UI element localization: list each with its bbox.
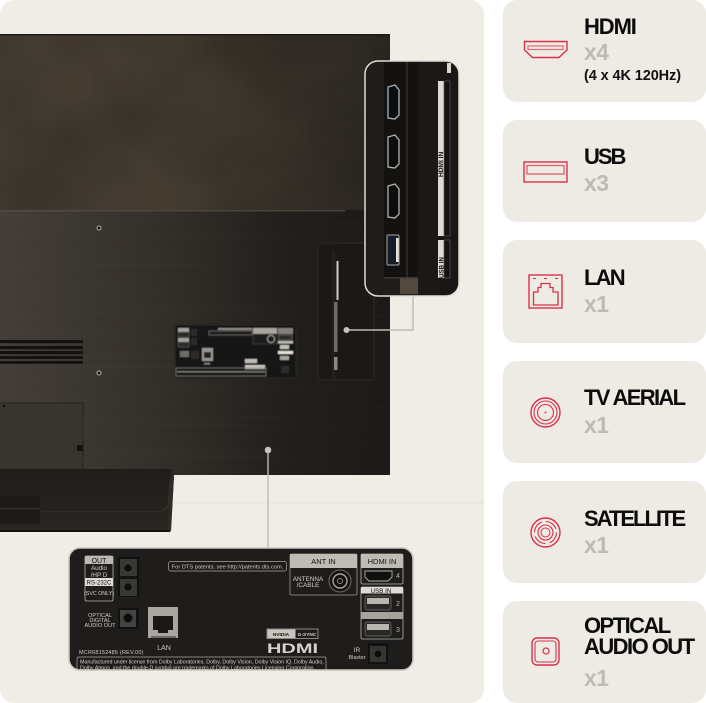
icon: aerial connector — [530, 397, 561, 428]
card: HDMI: HDMI — [584, 14, 636, 39]
card: HDMI: (4 x 4K 120Hz) — [584, 68, 681, 84]
callout: side ports — [365, 61, 459, 296]
optical audio out: OPTICAL — [88, 613, 112, 619]
HDMI IN: HDMI IN — [368, 557, 396, 566]
card: optical audio out — [503, 601, 706, 703]
card: optical audio out: AUDIO OUT — [584, 634, 694, 659]
LAN port: LAN — [157, 645, 171, 652]
optical audio out: DIGITAL — [89, 618, 111, 624]
audio and RS-232C labels: OUT — [92, 558, 107, 565]
card: USB — [503, 120, 706, 222]
licence note — [76, 656, 326, 670]
mounting holes — [97, 226, 101, 375]
USB IN: 2 — [396, 601, 400, 608]
vent — [0, 340, 83, 364]
LAN port — [148, 607, 178, 652]
audio and RS-232C labels: Audio — [91, 565, 108, 572]
IR blaster: IR — [354, 647, 361, 654]
card: optical audio out: x1 — [584, 665, 608, 691]
audio and RS-232C labels — [84, 556, 114, 601]
ANT IN: ANTENNA — [293, 576, 324, 583]
TV lower body — [0, 210, 390, 475]
card: USB: USB — [584, 144, 624, 169]
G-SYNC badge — [267, 629, 318, 638]
card: satellite: SATELLITE — [584, 506, 684, 531]
optical audio out — [84, 608, 139, 629]
G-SYNC badge: G-SYNC — [298, 632, 317, 638]
ANT IN — [290, 554, 357, 595]
card: optical audio out: OPTICAL — [584, 613, 670, 638]
audio and RS-232C labels: /HP D — [91, 572, 108, 579]
IR blaster: Blaster — [348, 655, 366, 661]
USB port label strip: USB IN — [438, 256, 446, 278]
side port recess — [318, 243, 374, 380]
ANT IN: /CABLE — [297, 582, 319, 589]
ANT IN: ANT IN — [311, 557, 336, 566]
HDMI ports — [388, 85, 399, 218]
card: TV aerial: x1 — [584, 412, 608, 438]
icon: satellite connector — [530, 517, 561, 548]
shadow under TV — [175, 501, 484, 504]
card: USB: x3 — [584, 170, 608, 196]
card: LAN: x1 — [584, 291, 608, 317]
card: HDMI — [503, 0, 706, 102]
USB IN — [361, 587, 403, 639]
G-SYNC badge: NVIDIA — [273, 632, 290, 638]
model number: MCR68152485 (REV.00) — [79, 650, 144, 656]
icon: HDMI port — [524, 40, 568, 58]
card: TV aerial: TV AERIAL — [584, 385, 684, 410]
TV upper panel — [0, 34, 390, 211]
card: satellite: x1 — [584, 532, 608, 558]
connector line to rear ports callout — [265, 447, 271, 548]
icon: USB port — [523, 161, 568, 183]
HDMI IN — [361, 554, 403, 584]
optical audio out: AUDIO OUT — [84, 623, 116, 629]
access cover — [0, 403, 83, 473]
callout: rear ports — [69, 548, 413, 677]
jacks — [118, 557, 139, 597]
USB port — [387, 235, 399, 265]
HDMI port labels strip — [438, 81, 450, 236]
card: satellite — [503, 481, 706, 583]
USB port label strip — [438, 240, 450, 278]
licence note: Manufactured under license from Dolby Laboratories. Dolby, Dolby Vision, Dolby Vision IQ, Dolby Audio, — [80, 660, 324, 666]
DTS note: For DTS patents, see http://patents.dts.com. — [172, 564, 284, 570]
icon: optical port — [531, 637, 560, 666]
panel: TV rear view — [0, 0, 484, 703]
USB IN: 3 — [396, 627, 400, 634]
HDMI port labels strip: HDMI IN — [438, 151, 445, 177]
IR blaster — [348, 643, 388, 664]
USB IN: USB IN — [371, 588, 391, 595]
DTS note — [168, 562, 286, 571]
mini rear ports panel — [175, 325, 296, 378]
card: TV aerial — [503, 361, 706, 463]
audio and RS-232C labels: RS-232C — [87, 580, 112, 586]
card: LAN — [503, 240, 706, 343]
icon: LAN port — [528, 274, 563, 309]
HDMI IN: 4 — [396, 573, 400, 580]
card: HDMI: x4 — [584, 39, 608, 65]
stand — [0, 469, 174, 532]
connector line to side ports callout — [344, 296, 413, 333]
card: LAN: LAN — [584, 265, 624, 290]
HDMI logo: HDMI — [267, 641, 318, 656]
audio and RS-232C labels: (SVC ONLY) — [84, 591, 114, 597]
licence note: Dolby Atmos, and the double-D symbol are trademarks of Dolby Laboratories Licensing Corporation. — [80, 666, 315, 672]
